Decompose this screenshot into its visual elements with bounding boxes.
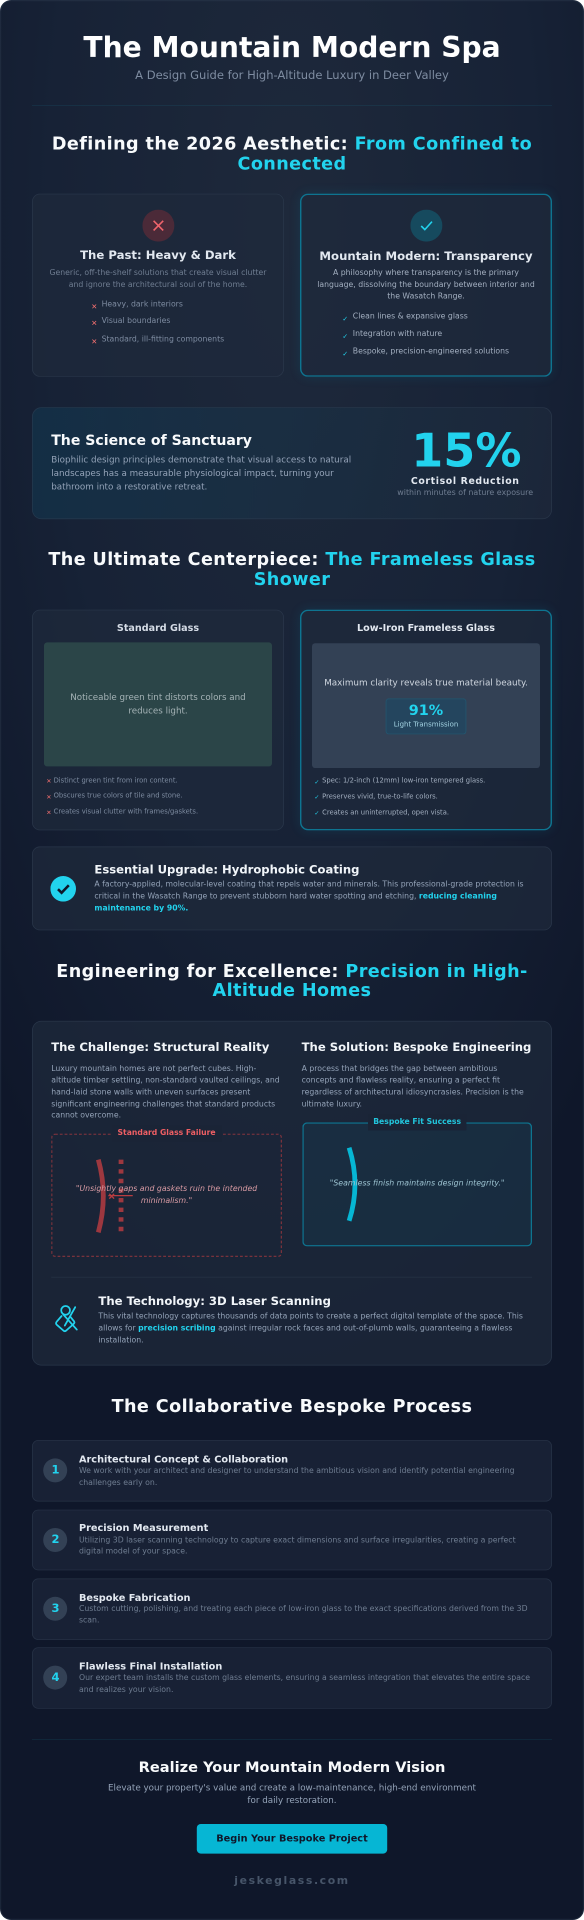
diagram label: Bespoke Fit Success: [373, 1118, 461, 1126]
list: ✕: [91, 303, 97, 311]
list: Distinct green tint from iron content.: [54, 776, 178, 784]
icon: red cross: [142, 210, 174, 242]
value: 91%: [409, 702, 443, 719]
green tint swatch: [44, 642, 272, 766]
number: 2: [52, 1533, 60, 1546]
paragraph: critical in the Wasatch Range to prevent stubborn hard water spotting and etching, reducing cleaning: [94, 892, 497, 901]
heading: Essential Upgrade: Hydrophobic Coating: [94, 864, 359, 876]
paragraph: Elevate your property's value and create a low-maintenance, high-end environment: [108, 1782, 476, 1793]
step text: and realizes your vision.: [79, 1685, 173, 1694]
number: 3: [52, 1602, 60, 1615]
heading: The Technology: 3D Laser Scanning: [98, 1295, 331, 1308]
number: [44, 1666, 68, 1690]
list: Creates an uninterrupted, open vista.: [322, 808, 449, 816]
card text: Generic, off-the-shelf solutions that create visual clutter: [50, 269, 266, 278]
step 3: [32, 1578, 552, 1640]
stat badge: [386, 698, 466, 734]
list: [46, 776, 198, 816]
card title: Low-Iron Frameless Glass: [357, 623, 495, 634]
step 4: [32, 1647, 552, 1709]
diagram label: Standard Glass Failure: [118, 1129, 216, 1138]
step text: digital model of your space.: [79, 1547, 187, 1556]
panel: low-iron glass: [300, 609, 552, 830]
diagram caption: minimalism.": [141, 1197, 192, 1205]
panel: engineering: [32, 1021, 552, 1366]
clear glass swatch: [312, 643, 540, 768]
call to action: [32, 1740, 552, 1892]
solution text: [302, 1065, 524, 1108]
paragraph: allows for precision scribing against irregular rock faces and out-of-plumb walls, guaranteeing a flawless: [98, 1324, 512, 1333]
step text: [79, 1674, 530, 1694]
solution text: A process that bridges the gap between ambitious: [302, 1065, 497, 1073]
step text: We work with your architect and designer to understand the ambitious vision and identify potential engineering: [79, 1467, 515, 1475]
heading: The Science of Sanctuary: [51, 433, 252, 449]
list: Preserves vivid, true-to-life colors.: [322, 792, 438, 800]
challenge text: cannot overcome.: [51, 1111, 121, 1120]
step text: [79, 1605, 528, 1625]
number: [44, 1528, 68, 1552]
section heading: process: The Collaborative Bespoke Process: [112, 1397, 472, 1417]
subtitle: A Design Guide for High-Altitude Luxury in Deer Valley: [135, 70, 449, 82]
solution text: regardless of architectural idiosyncrasies. Precision is the: [302, 1088, 524, 1097]
section heading: centerpiece: The Ultimate Centerpiece: The Frameless Glass Shower: [48, 550, 536, 589]
challenge heading: The Challenge: Structural Reality: [51, 1041, 269, 1054]
paragraph: A factory-applied, molecular-level coating that repels water and minerals. This professional-grade protection is: [94, 880, 524, 889]
card title: The Past: Heavy & Dark: [80, 249, 236, 262]
paragraph: Biophilic design principles demonstrate that visual access to natural: [51, 455, 351, 465]
list: ✕: [91, 320, 97, 328]
list: [91, 300, 224, 346]
diagram label: [112, 1126, 221, 1142]
list: ✕: [46, 809, 51, 816]
panel: mountain modern: [300, 193, 552, 377]
list: ✕: [46, 793, 51, 801]
technology row: [51, 1278, 532, 1354]
step title: Bespoke Fabrication: [79, 1592, 191, 1603]
number: 4: [52, 1671, 60, 1684]
card title: Standard Glass: [117, 622, 199, 634]
step title: Flawless Final Installation: [79, 1661, 222, 1672]
list: Integration with nature: [353, 329, 442, 338]
list: ✓: [342, 333, 348, 341]
section heading: aesthetic: Defining the 2026 Aesthetic: From Confined to Connected: [52, 135, 532, 174]
solution text: ultimate luxury.: [302, 1100, 362, 1108]
number: 1: [52, 1464, 60, 1477]
stat note: within minutes of nature exposure: [397, 489, 533, 497]
icon: check badge: [50, 876, 76, 902]
card text: and ignore the architectural soul of the home.: [69, 281, 247, 290]
paragraph: installation.: [98, 1336, 144, 1344]
website: jeskeglass.com: [234, 1874, 350, 1887]
icon: laser scan: [55, 1305, 78, 1332]
list: ✓: [314, 778, 319, 786]
card text: [50, 269, 266, 290]
paragraph: [98, 1312, 523, 1344]
label: Light Transmission: [394, 721, 458, 729]
section heading: engineering: Engineering for Excellence: Precision in High-Altitude Homes: [56, 962, 528, 1001]
step text: Our expert team installs the custom glass elements, ensuring a seamless integration that elevates the entire space: [79, 1674, 530, 1682]
diagram caption: "Unsightly gaps and gaskets ruin the intended: [76, 1185, 257, 1194]
list: Standard, ill-fitting components: [102, 335, 224, 344]
solution text: concepts and flawless reality, ensuring a perfect fit: [302, 1076, 500, 1085]
step 2: [32, 1509, 552, 1571]
paragraph: maintenance by 90%.: [94, 904, 188, 912]
paragraph: [51, 455, 351, 492]
challenge text: hand-laid stone walls with uneven surfaces present: [51, 1088, 250, 1097]
swatch caption: Maximum clarity reveals true material beauty.: [324, 678, 528, 688]
button: Begin Your Bespoke Project: [216, 1833, 368, 1844]
diagram label: [368, 1114, 466, 1130]
challenge text: altitude timber settling, non-standard vaulted ceilings, and: [51, 1076, 280, 1085]
list: ✓: [342, 315, 348, 323]
list: Bespoke, precision-engineered solutions: [353, 347, 509, 356]
step text: Custom cutting, polishing, and treating each piece of low-iron glass to the exact specifications derived from the 3D: [79, 1605, 528, 1614]
step title: Architectural Concept & Collaboration: [79, 1454, 288, 1465]
list: Clean lines & expansive glass: [353, 312, 468, 321]
paragraph: This vital technology captures thousands of data points to create a perfect digital template of the space. This: [98, 1312, 523, 1321]
number: [44, 1459, 68, 1483]
number: [44, 1597, 68, 1621]
list: Obscures true colors of tile and stone.: [54, 791, 182, 799]
title: The Mountain Modern Spa: [83, 31, 501, 64]
panel: standard glass: [32, 609, 284, 830]
challenge text: [51, 1065, 280, 1120]
paragraph: landscapes has a measurable physiological impact, turning your: [51, 468, 334, 479]
step text: Utilizing 3D laser scanning technology to capture exact dimensions and surface irregularities, creating a perfect: [79, 1536, 516, 1544]
paragraph: bathroom into a restorative retreat.: [51, 482, 207, 492]
list: ✕: [46, 778, 51, 785]
list: ✓: [314, 794, 319, 801]
card title: Mountain Modern: Transparency: [319, 250, 533, 263]
challenge text: significant engineering challenges that standard products: [51, 1100, 275, 1108]
step text: [79, 1467, 515, 1487]
challenge text: Luxury mountain homes are not perfect cubes. High-: [51, 1065, 256, 1073]
list: ✓: [342, 350, 348, 358]
diagram caption: "Seamless finish maintains design integrity.": [330, 1179, 504, 1188]
stat: 15%: 15%: [411, 424, 522, 478]
list: Creates visual clutter with frames/gaskets.: [54, 807, 198, 815]
paragraph: [108, 1782, 476, 1806]
paragraph: for daily restoration.: [247, 1795, 337, 1806]
step text: scan.: [79, 1616, 99, 1625]
card text: [317, 269, 535, 301]
panel: science of sanctuary: [32, 407, 552, 519]
swatch caption: Noticeable green tint distorts colors and: [70, 692, 246, 703]
step text: challenges early on.: [79, 1478, 157, 1487]
list: ✕: [91, 338, 97, 346]
diagram: standard glass failure: [51, 1129, 282, 1257]
icon: teal check: [410, 210, 442, 242]
list: Visual boundaries: [102, 317, 170, 326]
list: ✓: [314, 810, 319, 817]
paragraph: [94, 880, 524, 912]
list: Spec: 1/2-inch (12mm) low-iron tempered glass.: [322, 776, 485, 784]
step 1: [32, 1440, 552, 1502]
diagram caption: [76, 1185, 258, 1205]
swatch caption: reduces light.: [128, 705, 188, 716]
card text: A philosophy where transparency is the primary: [333, 269, 519, 278]
header: [32, 24, 552, 105]
stat label: Cortisol Reduction: [411, 475, 520, 486]
panel: hydrophobic coating: [32, 846, 552, 931]
panel: the past: [32, 193, 284, 377]
step title: Precision Measurement: [79, 1523, 208, 1534]
heading: Realize Your Mountain Modern Vision: [139, 1760, 445, 1776]
swatch caption: [70, 692, 246, 716]
solution heading: The Solution: Bespoke Engineering: [302, 1041, 531, 1054]
step text: [79, 1536, 516, 1556]
list: Heavy, dark interiors: [102, 300, 183, 309]
diagram: bespoke fit success: [302, 1122, 532, 1246]
list: [342, 312, 509, 358]
card text: language, dissolving the boundary between interior and: [317, 281, 535, 289]
list: [314, 776, 485, 817]
button: [197, 1824, 387, 1853]
card text: the Wasatch Range.: [387, 292, 465, 301]
